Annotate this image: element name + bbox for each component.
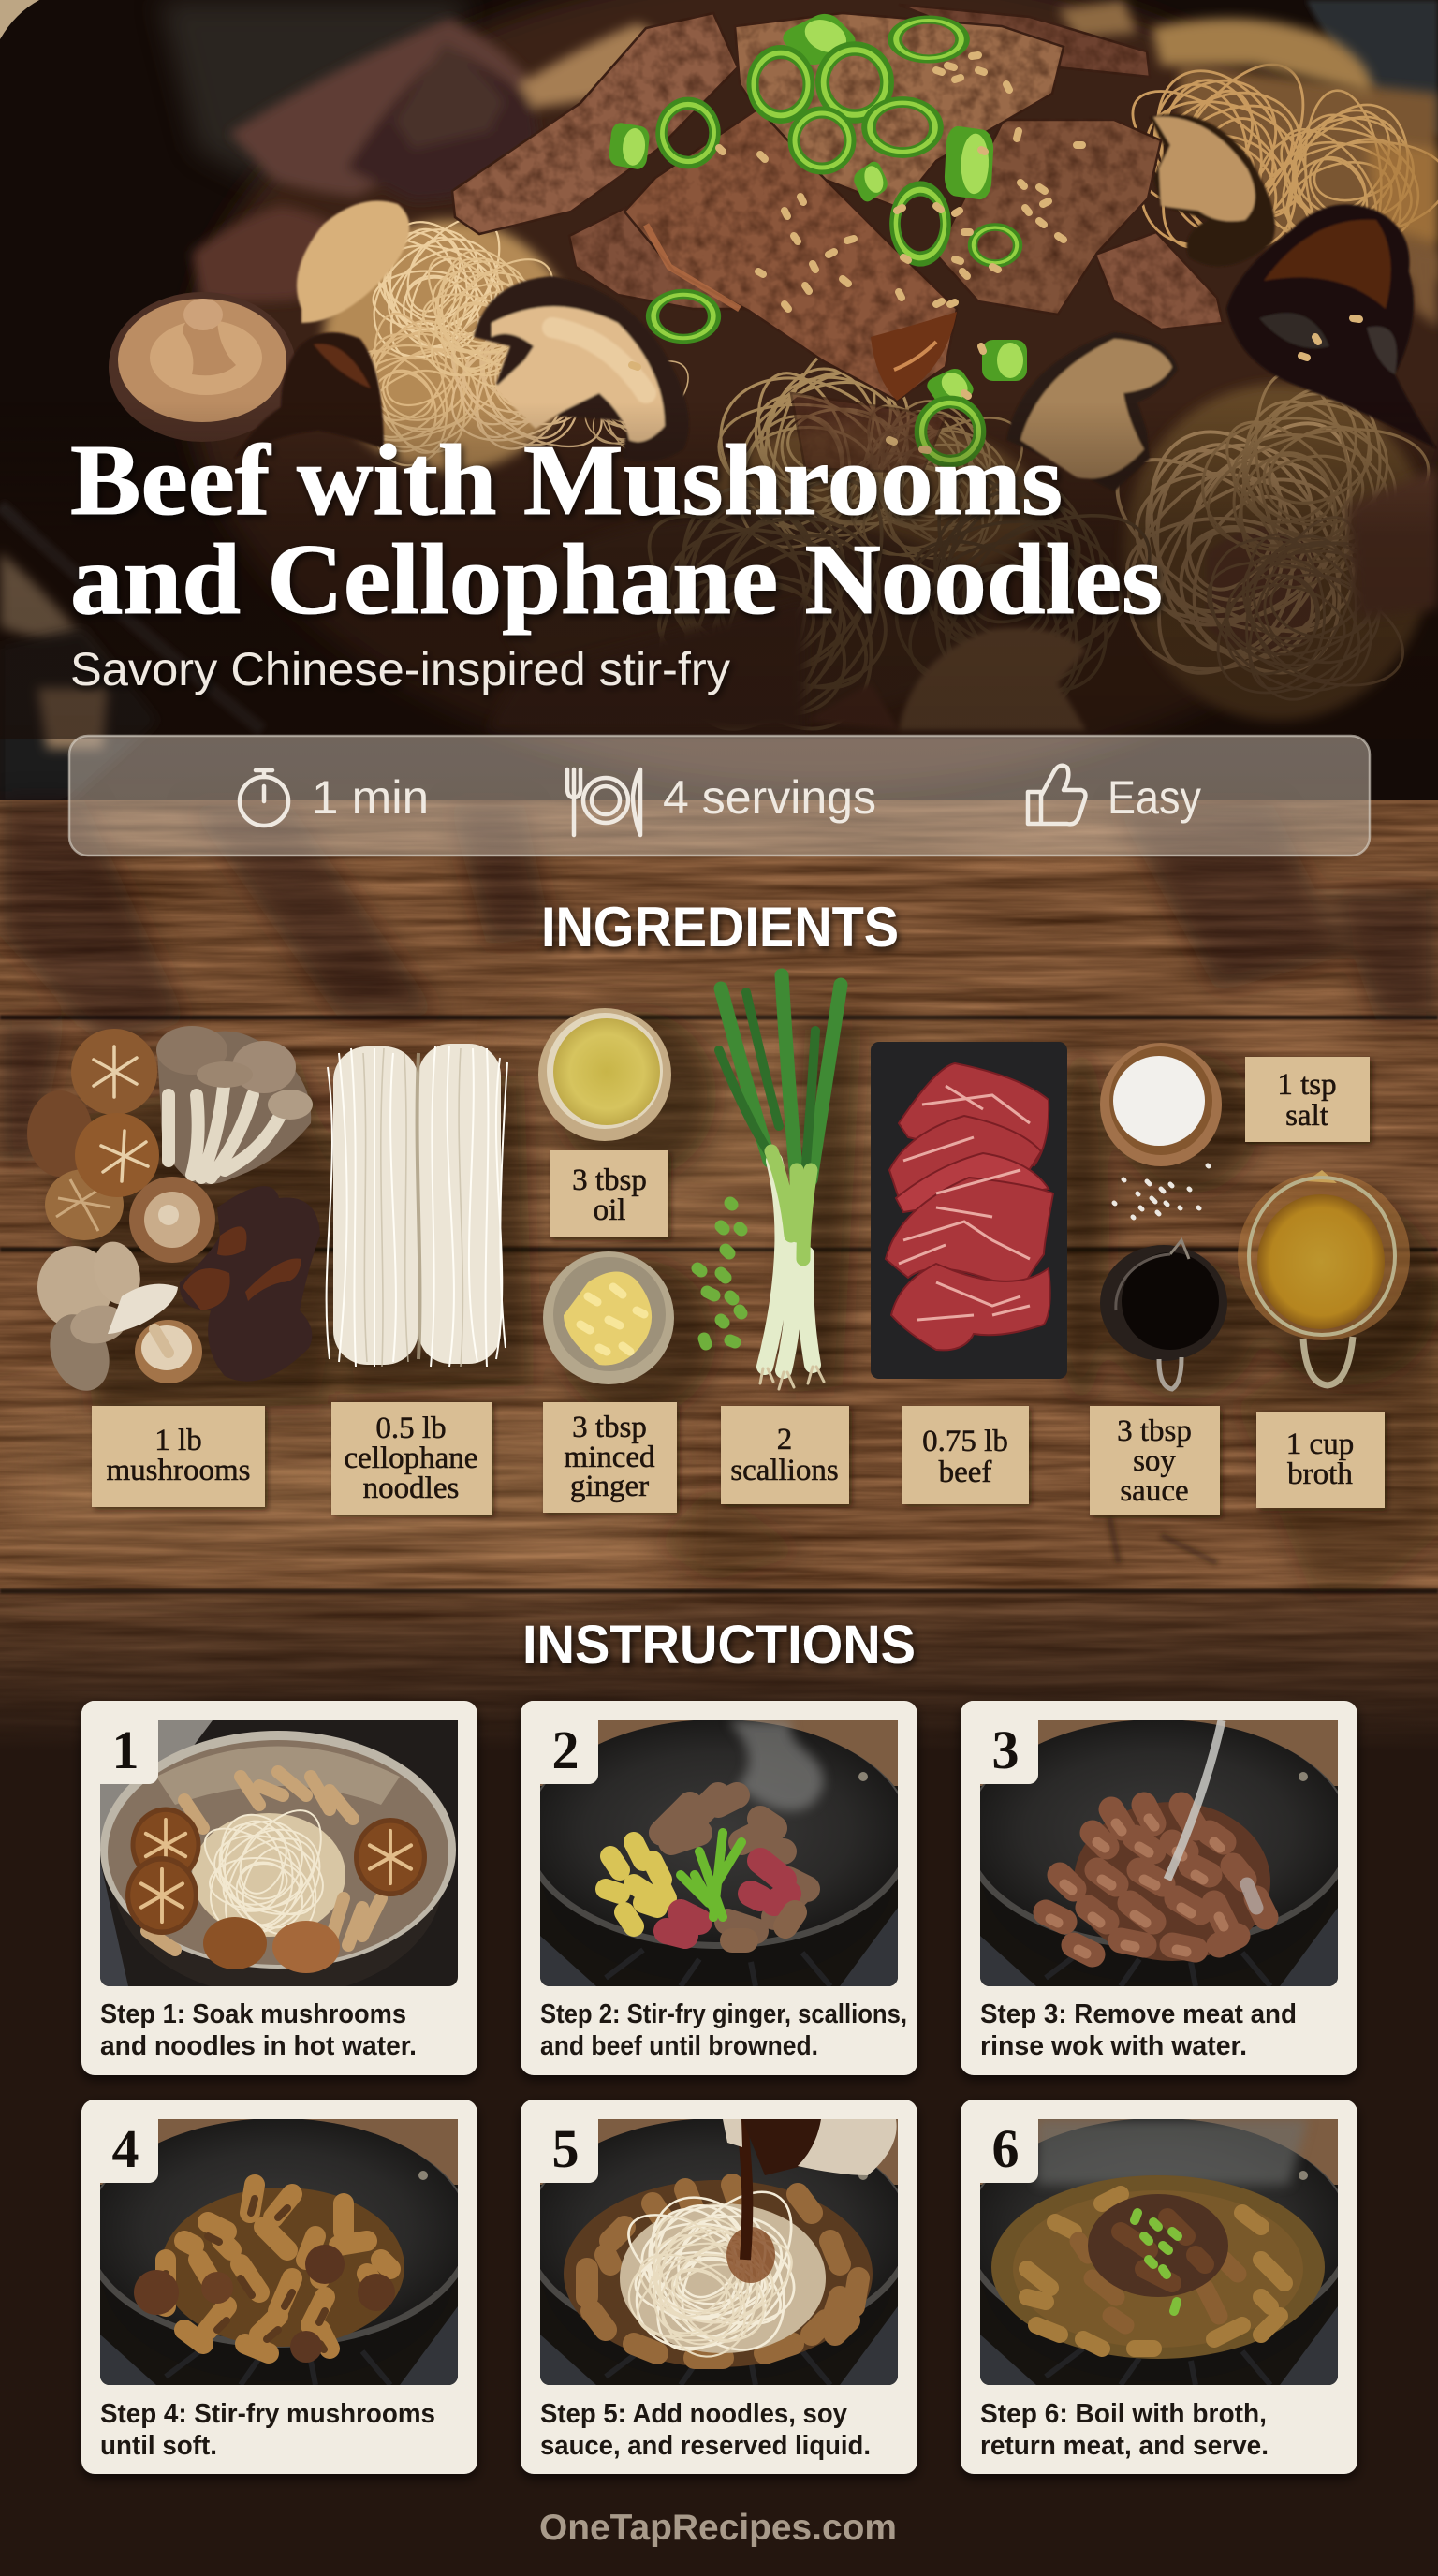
step 1 text: and noodles in hot water. [100,2031,417,2061]
scallion rings [608,9,1027,461]
sesame seeds [632,55,1359,450]
step 4 number tab: 4 [112,2118,139,2179]
wood background [0,800,1438,2576]
step 2 number tab [521,1701,598,1784]
label: oil: 3 tbsp [572,1164,647,1197]
label: beef [902,1406,1029,1504]
step 5 number tab [521,2100,598,2183]
heading: ingredients: INGREDIENTS [541,896,899,959]
label: soy sauce: soy [1133,1444,1176,1478]
step 5 text: Step 5: Add noodles, soy [540,2399,847,2429]
ingredient labels [92,1057,1385,1515]
label: noodles: noodles [363,1471,459,1505]
step 2 card [521,1701,917,2075]
title: and Cellophane Noodles [70,524,1163,636]
label: soy sauce: 3 tbsp [1117,1414,1192,1448]
step 1 text: Step 1: Soak mushrooms [100,1999,406,2029]
step 5 image: noodles and sauce [523,2118,913,2400]
step 6 card [961,2100,1357,2474]
ingredient: chopped scallions [697,1203,741,1344]
icon: stopwatch [240,770,288,826]
hero food photo [0,0,1438,805]
step 4 text [100,2399,435,2461]
label: scallions [721,1406,849,1504]
step 1 image: soaking pot [100,1720,458,1997]
step 1 number tab: 1 [112,1720,139,1780]
lower right shiitake slice [1006,332,1178,491]
label: ginger: 3 tbsp [572,1411,647,1444]
ingredient: oil bowl [538,1008,671,1141]
ingredient: broth jug [1238,1170,1410,1385]
step 6 image: finished dish boiling [963,2118,1353,2385]
label: scallions: 2 [777,1423,792,1456]
center shiitake slice [474,276,689,461]
label: soy sauce: sauce [1120,1474,1189,1508]
step 6 text: return meat, and serve. [980,2431,1269,2461]
stats bar [69,736,1370,856]
step 1 text [100,1999,417,2061]
title scrim [0,402,1438,739]
up-facing shiitake [109,292,296,442]
label: oil [550,1150,668,1237]
label: oil: oil [594,1193,625,1227]
step 2 text [540,1999,907,2061]
title: Beef with Mushrooms [70,425,1063,536]
servings: 4 servings [663,771,876,824]
ingredient: scallions [719,975,841,1389]
step 5 number tab: 5 [552,2118,579,2179]
label: ginger: ginger [570,1470,649,1503]
step 3 text [980,1999,1297,2061]
label: noodles [331,1402,492,1515]
beef slices [452,5,1223,473]
step 6 text: Step 6: Boil with broth, [980,2399,1267,2429]
difficulty: Easy [1108,771,1201,824]
wood ear right [1226,204,1437,449]
label: ginger: minced [564,1441,655,1474]
icon: thumbs up [1028,766,1085,824]
ingredient: mushrooms [27,1026,320,1399]
step 2 text: Step 2: Stir-fry ginger, scallions, [540,1999,907,2029]
step 3 image: rinsing wok [963,1720,1353,1986]
label: scallions: scallions [730,1454,839,1487]
right shiitake slice [1150,114,1275,267]
step 4 text: Step 4: Stir-fry mushrooms [100,2399,435,2429]
step 3 card [961,1701,1357,2075]
step 4 image: mushrooms in wok [83,2118,473,2385]
label: mushrooms: 1 lb [154,1424,202,1457]
label: noodles: 0.5 lb [375,1412,447,1445]
step 5 card [521,2100,917,2474]
step 3 text: Step 3: Remove meat and [980,1999,1297,2029]
ingredient: ginger bowl [543,1251,674,1384]
wood ear left [234,332,384,459]
label: broth: 1 cup [1286,1427,1354,1461]
step 1 number tab [81,1701,158,1784]
bottom blurred mushroom [899,628,1086,730]
small mushroom [135,1320,202,1383]
title [70,425,1163,636]
step 2 image: stir-fry in wok [523,1720,913,1986]
step 2 text: and beef until browned. [540,2031,818,2061]
step 3 number tab [961,1701,1038,1784]
label: broth [1256,1412,1385,1508]
step 6 number tab [961,2100,1038,2183]
label: soy sauce [1090,1406,1220,1515]
step 4 text: until soft. [100,2431,217,2461]
ingredient: soy sauce jug [1100,1240,1227,1389]
ingredient: salt bowl [1100,1043,1222,1166]
right beef under noodles [1208,526,1318,652]
heading: instructions: INSTRUCTIONS [522,1615,916,1676]
plank seams [0,1017,1438,1591]
label: salt: salt [1285,1099,1328,1133]
ingredient: beef on slate [871,1042,1067,1379]
step 6 text [980,2399,1269,2461]
far blurred beef and wood ear [192,0,1438,618]
noodle tangles [290,38,1438,795]
label: beef: 0.75 lb [922,1425,1008,1458]
label: beef: beef [939,1456,991,1489]
hero broth base [187,0,1438,786]
label: mushrooms [92,1406,265,1507]
label: broth: broth [1287,1457,1353,1491]
footer website: OneTapRecipes.com [539,2508,897,2548]
step 3 number tab: 3 [992,1720,1019,1780]
step 1 card [81,1701,477,2075]
label: noodles: cellophane [345,1442,477,1475]
label: salt: 1 tsp [1277,1068,1337,1102]
light shadows on wood [0,800,1438,1591]
wood ear pile [180,1186,320,1382]
step 4 number tab [81,2100,158,2183]
step 4 card [81,2100,477,2474]
step 5 text: sauce, and reserved liquid. [540,2431,871,2461]
ingredient: cellophane noodles [327,1044,507,1367]
icon: fork and plate [567,769,640,835]
oyster mushroom cluster low [37,1237,178,1399]
subtitle: Savory Chinese-inspired stir-fry [70,643,730,695]
oyster mushroom bunch [156,1026,313,1184]
step 6 number tab: 6 [992,2118,1019,2179]
label: salt [1245,1057,1370,1142]
step 2 number tab: 2 [552,1720,579,1780]
label: mushrooms: mushrooms [106,1454,251,1487]
cook time: 1 min [312,771,429,824]
label: ginger [543,1402,677,1513]
pale stem mushroom [297,200,409,323]
step 5 text [540,2399,871,2461]
ingredient shadows [56,1011,1438,1418]
step 3 text: rinse wok with water. [980,2031,1247,2061]
shiitake caps [27,1029,215,1263]
spilled salt [1114,1165,1209,1218]
